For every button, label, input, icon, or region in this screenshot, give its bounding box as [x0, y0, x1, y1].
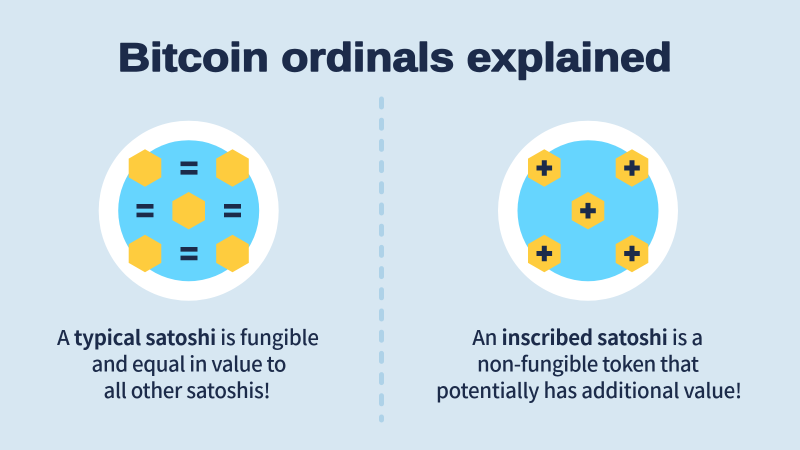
dashed divider [379, 99, 384, 420]
text: typical satoshi caption: all other satoshis! [104, 374, 270, 404]
panel: typical satoshi [57, 121, 319, 404]
text: typical satoshi caption [57, 321, 319, 404]
panel: inscribed satoshi [436, 121, 742, 404]
icon: fungible satoshis [99, 121, 279, 301]
icon: non-fungible satoshis [498, 121, 678, 301]
text: inscribed satoshi caption: potentially has additional value! [436, 374, 742, 404]
text: typical satoshi caption: and equal in value to [92, 348, 286, 378]
title: Bitcoin ordinals explained [118, 36, 672, 80]
text: inscribed satoshi caption [436, 321, 742, 404]
text: inscribed satoshi caption: An inscribed satoshi is a [472, 321, 703, 351]
text: inscribed satoshi caption: non-fungible token that [477, 348, 699, 378]
text: typical satoshi caption: A typical satoshi is fungible [57, 321, 319, 351]
